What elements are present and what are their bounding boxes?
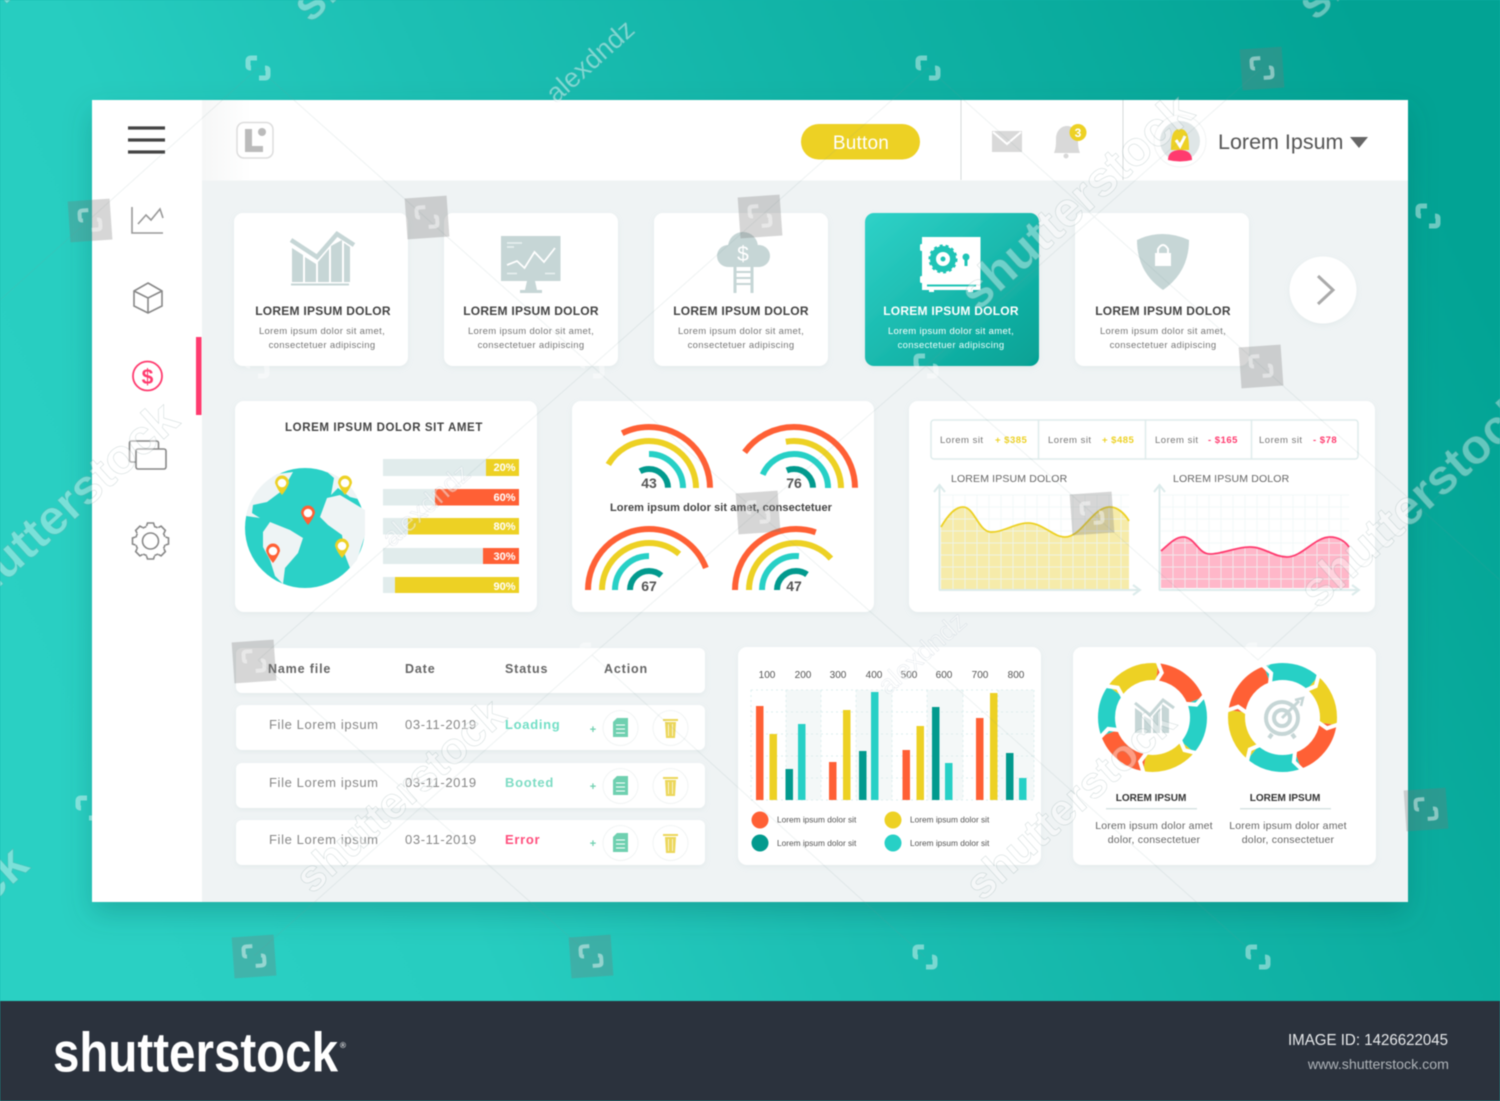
icon: dropdown arrow bbox=[1350, 137, 1368, 148]
stats strip: Lorem sit bbox=[1048, 435, 1092, 446]
chart: pink area: LOREM IPSUM DOLOR bbox=[1173, 473, 1290, 485]
ring caption 1: Lorem ipsum dolor amet bbox=[1095, 820, 1213, 832]
table row 3: File Lorem ipsum bbox=[269, 832, 379, 847]
trademark: ® bbox=[340, 1041, 346, 1050]
table row 1: File Lorem ipsum bbox=[269, 717, 379, 732]
legend bbox=[752, 812, 990, 852]
feature card 5 bbox=[1075, 213, 1249, 366]
axis labels: 300 bbox=[830, 670, 847, 681]
ring caption 2: Lorem ipsum dolor amet bbox=[1229, 820, 1347, 832]
feature card 5: LOREM IPSUM DOLOR bbox=[1095, 304, 1231, 318]
plot grid bbox=[751, 690, 1034, 800]
table row 2: File Lorem ipsum bbox=[269, 775, 379, 790]
icon: hamburger menu bbox=[128, 128, 165, 152]
ring caption 2: LOREM IPSUM bbox=[1250, 793, 1320, 804]
progress bars: 20% bbox=[493, 462, 516, 474]
image id: IMAGE ID: 1426622045 bbox=[1288, 1032, 1448, 1049]
gauge 67 bbox=[588, 529, 710, 594]
icon: logo bbox=[237, 122, 273, 158]
avatar bbox=[1154, 115, 1206, 167]
table row 3 bbox=[236, 820, 705, 865]
progress bars: 90% bbox=[493, 581, 516, 593]
panel: radial gauges bbox=[572, 401, 874, 612]
gauge 76: 76 bbox=[786, 475, 802, 491]
panel: cycle rings bbox=[1073, 647, 1376, 865]
legend: Lorem ipsum dolor sit bbox=[777, 838, 857, 848]
table row 1: + bbox=[590, 724, 596, 736]
user name: Lorem Ipsum bbox=[1218, 130, 1343, 154]
watermark overlay: shutterstock bbox=[956, 696, 1185, 909]
table row 1 bbox=[236, 705, 705, 750]
gauge 76 bbox=[733, 427, 855, 491]
gauge 43 bbox=[588, 427, 710, 491]
table row 2: Booted bbox=[505, 775, 554, 790]
gauge 47 bbox=[735, 529, 857, 594]
feature card 2: Lorem ipsum dolor sit amet, bbox=[468, 326, 594, 337]
icon: cloud ladder: $ bbox=[737, 243, 749, 266]
table header: Name file bbox=[268, 662, 331, 676]
feature card 1: consectetuer adipiscing bbox=[269, 340, 375, 351]
axis labels: 400 bbox=[866, 670, 883, 681]
icon: cloud ladder bbox=[717, 232, 770, 293]
stats strip bbox=[931, 420, 1358, 459]
ring caption 1: dolor, consectetuer bbox=[1108, 834, 1201, 846]
feature card 2: consectetuer adipiscing bbox=[478, 340, 584, 351]
dashboard window bbox=[92, 100, 1408, 902]
heading: LOREM IPSUM DOLOR SIT AMET bbox=[285, 422, 483, 434]
feature card 4 active: LOREM IPSUM DOLOR bbox=[883, 304, 1019, 318]
icon: mail bbox=[992, 131, 1022, 152]
axis labels: 500 bbox=[901, 670, 918, 681]
chart: yellow area: LOREM IPSUM DOLOR bbox=[951, 473, 1068, 485]
feature card 1: Lorem ipsum dolor sit amet, bbox=[259, 326, 385, 337]
table row 3: Error bbox=[505, 832, 540, 847]
stats strip: Lorem sit bbox=[1259, 435, 1303, 446]
feature card 2 bbox=[444, 213, 618, 366]
globe bbox=[245, 468, 365, 588]
feature card 4 active bbox=[865, 213, 1039, 366]
table row 2 bbox=[236, 763, 705, 808]
icon: monitor bbox=[501, 236, 560, 293]
watermark overlay: shutterstock bbox=[286, 689, 515, 902]
ring caption 1: LOREM IPSUM bbox=[1116, 793, 1186, 804]
chart: yellow area bbox=[934, 473, 1140, 595]
cycle ring 1 bbox=[1097, 660, 1207, 774]
panel: world map with progress bars bbox=[235, 401, 537, 612]
watermark overlay: alexdndz bbox=[872, 606, 972, 700]
watermark overlay: alexdndz bbox=[376, 458, 476, 552]
cycle ring 2 bbox=[1225, 662, 1340, 773]
icon: dollar active: $ bbox=[142, 366, 154, 389]
legend: Lorem ipsum dolor sit bbox=[910, 814, 990, 824]
top header bar bbox=[202, 100, 1408, 180]
stats strip: - $78 bbox=[1313, 435, 1337, 446]
feature card 3 bbox=[654, 213, 828, 366]
active indicator bbox=[196, 337, 202, 415]
icon: dollar active bbox=[133, 362, 162, 390]
table header bbox=[236, 648, 705, 693]
button: Button bbox=[833, 133, 889, 154]
stats strip: Lorem sit bbox=[1155, 435, 1199, 446]
axis labels: 600 bbox=[936, 670, 953, 681]
panel: area charts bbox=[909, 401, 1375, 612]
icon: line chart bbox=[132, 207, 163, 233]
feature card 4 active: consectetuer adipiscing bbox=[898, 340, 1004, 351]
next arrow bbox=[1290, 256, 1356, 324]
stats strip: + $385 bbox=[995, 435, 1028, 446]
ring caption 2 bbox=[1229, 793, 1347, 846]
axis labels: 800 bbox=[1008, 670, 1025, 681]
feature card 1 bbox=[234, 213, 408, 366]
icon: ring chart bbox=[1135, 700, 1174, 733]
feature card 3: Lorem ipsum dolor sit amet, bbox=[678, 326, 804, 337]
feature card 4 active: Lorem ipsum dolor sit amet, bbox=[888, 326, 1014, 337]
sidebar bbox=[92, 100, 202, 902]
icon: cube bbox=[134, 283, 162, 313]
icon: bell with badge: 3 bbox=[1075, 126, 1082, 140]
table header: Action bbox=[604, 662, 648, 676]
icon: shield lock bbox=[1137, 234, 1189, 290]
stats strip: Lorem sit bbox=[940, 435, 984, 446]
axis labels: 100 bbox=[759, 670, 776, 681]
button bbox=[801, 124, 920, 160]
icon: target bbox=[1266, 698, 1303, 738]
icon: gear bbox=[132, 523, 168, 559]
legend: Lorem ipsum dolor sit bbox=[777, 814, 857, 824]
ring caption 1 bbox=[1095, 793, 1213, 846]
progress bars: 30% bbox=[493, 551, 516, 563]
watermark overlay: shutterstock bbox=[949, 83, 1204, 320]
panel: bar chart bbox=[738, 647, 1041, 865]
feature card 5: consectetuer adipiscing bbox=[1110, 340, 1216, 351]
feature card 3: consectetuer adipiscing bbox=[688, 340, 794, 351]
map pins bbox=[266, 476, 352, 563]
table row 3: + bbox=[590, 838, 596, 850]
table row 2: + bbox=[590, 781, 596, 793]
progress bars: 80% bbox=[493, 521, 516, 533]
chart: pink area bbox=[1154, 473, 1359, 595]
table row 1: Loading bbox=[505, 717, 560, 732]
table header: Status bbox=[505, 662, 548, 676]
feature card 3: LOREM IPSUM DOLOR bbox=[673, 304, 809, 318]
gauge 47: 47 bbox=[786, 578, 802, 594]
stats strip: + $485 bbox=[1102, 435, 1135, 446]
stats strip: - $165 bbox=[1208, 435, 1238, 446]
icon: cards bbox=[130, 441, 166, 469]
axis labels bbox=[759, 670, 1025, 681]
feature card 2: LOREM IPSUM DOLOR bbox=[463, 304, 599, 318]
feature card 1: LOREM IPSUM DOLOR bbox=[255, 304, 391, 318]
gauge caption: Lorem ipsum dolor sit amet, consectetuer bbox=[610, 502, 833, 514]
ring caption 2: dolor, consectetuer bbox=[1242, 834, 1335, 846]
table row 3: 03-11-2019 bbox=[405, 832, 477, 847]
icon: bar growth bbox=[291, 234, 354, 286]
progress bars bbox=[383, 459, 519, 593]
table row 2: 03-11-2019 bbox=[405, 775, 477, 790]
table: files bbox=[236, 648, 705, 865]
website: www.shutterstock.com bbox=[1307, 1057, 1449, 1073]
table header: Date bbox=[405, 662, 436, 676]
icon: safe bbox=[920, 237, 980, 292]
bars bbox=[756, 692, 1026, 800]
gauge 67: 67 bbox=[641, 578, 657, 594]
watermark overlay: alexdndz bbox=[540, 14, 640, 108]
icon: bell with badge bbox=[1054, 124, 1086, 158]
feature card 5: Lorem ipsum dolor sit amet, bbox=[1100, 326, 1226, 337]
progress bars: 60% bbox=[493, 492, 516, 504]
gauge 43: 43 bbox=[641, 475, 657, 491]
footer logo: shutterstock bbox=[53, 1020, 339, 1084]
legend: Lorem ipsum dolor sit bbox=[910, 838, 990, 848]
axis labels: 700 bbox=[972, 670, 989, 681]
table row 1: 03-11-2019 bbox=[405, 717, 477, 732]
axis labels: 200 bbox=[795, 670, 812, 681]
footer bar bbox=[0, 1001, 1500, 1101]
